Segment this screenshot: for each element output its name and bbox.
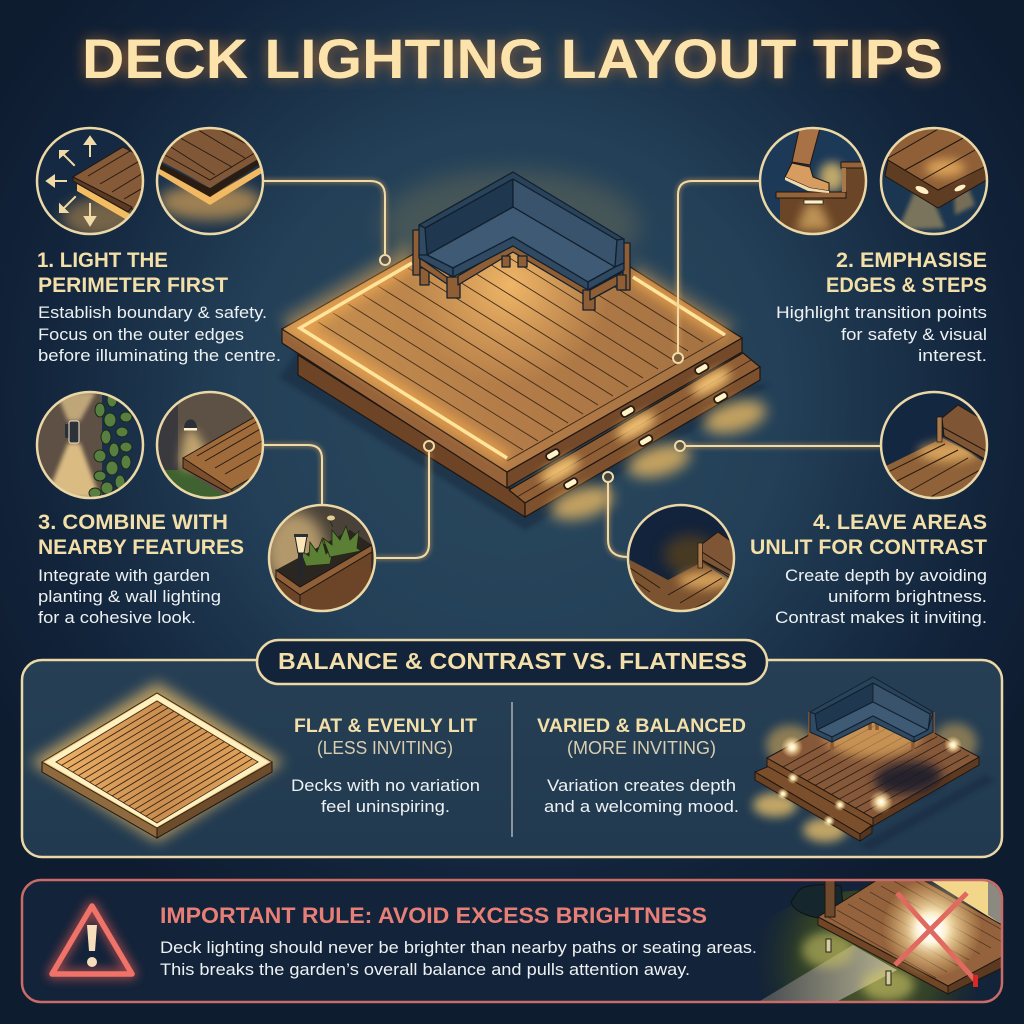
perimeter light strips: [300, 263, 725, 458]
rule text: Deck lighting should never be brighter than nearby paths or seating areas.: [160, 938, 757, 957]
tip 2 text: for safety & visual: [841, 325, 987, 344]
icon: under-edge lights circle: [880, 125, 990, 237]
tip 2 text: [776, 249, 987, 365]
title: DECK LIGHTING LAYOUT TIPS: [82, 27, 943, 90]
tip 2 text: 2. EMPHASISE: [836, 249, 987, 272]
tip 3 text: 3. COMBINE WITH: [38, 511, 228, 534]
title: DECK LIGHTING LAYOUT TIPS: [82, 27, 943, 90]
panel divider: [511, 702, 513, 837]
upper deck fascias: [282, 329, 507, 488]
heading pill: BALANCE & CONTRAST VS. FLATNESS: [278, 648, 747, 674]
varied text: [537, 716, 746, 816]
panel: important rule: [20, 878, 1004, 1004]
arrows: [47, 137, 95, 225]
flat text: Decks with no variation: [291, 776, 480, 795]
flat text: (LESS INVITING): [317, 738, 453, 758]
tip 1 text: 1. LIGHT THE: [37, 249, 168, 272]
central deck illustration: [280, 170, 770, 530]
flat text: FLAT & EVENLY LIT: [294, 716, 477, 737]
connector lines and anchor dots: [263, 181, 881, 558]
icon: unlit corner circle A: [880, 390, 990, 502]
warning triangle icon: [52, 906, 132, 974]
lower step: [298, 353, 760, 517]
tip 4 text: UNLIT FOR CONTRAST: [750, 536, 987, 559]
tip 4 text: Contrast makes it inviting.: [775, 608, 987, 627]
outdoor sofa: [413, 172, 630, 310]
tip 3 text: NEARBY FEATURES: [38, 536, 244, 559]
tip 1 text: PERIMETER FIRST: [38, 274, 228, 297]
red cross: [895, 893, 975, 980]
icon: planter with path light circle: [265, 503, 378, 618]
step light pools: [537, 364, 770, 526]
heading pill: [257, 640, 767, 684]
deck boards: [318, 214, 703, 450]
mini sofa: [810, 677, 933, 750]
tip 4 text: Create depth by avoiding: [785, 566, 987, 585]
flat text: feel uninspiring.: [321, 797, 450, 816]
rule text: [160, 903, 757, 979]
tip 1 text: [37, 249, 281, 365]
flat text: [291, 716, 480, 816]
varied deck illustration: [753, 677, 995, 850]
icon: perimeter arrows circle: [35, 125, 148, 238]
varied text: VARIED & BALANCED: [537, 716, 746, 737]
tip 2 text: EDGES & STEPS: [826, 274, 987, 297]
step lights: [545, 362, 729, 490]
tip 1 text: before illuminating the centre.: [38, 346, 281, 365]
tip 2 text: Highlight transition points: [776, 303, 987, 322]
warm halo behind deck: [380, 170, 640, 280]
tip 2 text: interest.: [918, 346, 987, 365]
tip 4 text: 4. LEAVE AREAS: [813, 511, 987, 534]
icon: unlit corner circle B: [628, 505, 738, 620]
deck surface: [282, 195, 742, 472]
tip 4 text: [750, 511, 987, 627]
icon: wall lamp and deck circle: [155, 390, 265, 502]
path lights: [826, 939, 891, 985]
varied text: (MORE INVITING): [567, 738, 716, 758]
too-bright deck scene: [754, 881, 1001, 1001]
rule text: IMPORTANT RULE: AVOID EXCESS BRIGHTNESS: [160, 903, 707, 928]
icon: deck edge strip circle: [155, 122, 265, 237]
tip 3 text: for a cohesive look.: [38, 608, 196, 627]
deck ground shadow: [280, 350, 770, 530]
tip 3 text: [38, 511, 244, 627]
rule text: This breaks the garden’s overall balance and pulls attention away.: [160, 960, 690, 979]
varied text: and a welcoming mood.: [544, 797, 739, 816]
tip 1 text: Focus on the outer edges: [38, 325, 244, 344]
tip 1 text: Establish boundary & safety.: [38, 303, 267, 322]
tip 3 text: planting & wall lighting: [38, 587, 221, 606]
icon: wall light with vines circle: [35, 390, 147, 502]
rule panel border: [22, 880, 1002, 1002]
icon: foot on lit step circle: [758, 125, 870, 240]
tip 4 text: uniform brightness.: [828, 587, 987, 606]
flat deck illustration: [30, 682, 284, 842]
varied text: Variation creates depth: [547, 776, 736, 795]
tip 3 text: Integrate with garden: [38, 566, 210, 585]
panel: balance and contrast: [22, 640, 1002, 857]
